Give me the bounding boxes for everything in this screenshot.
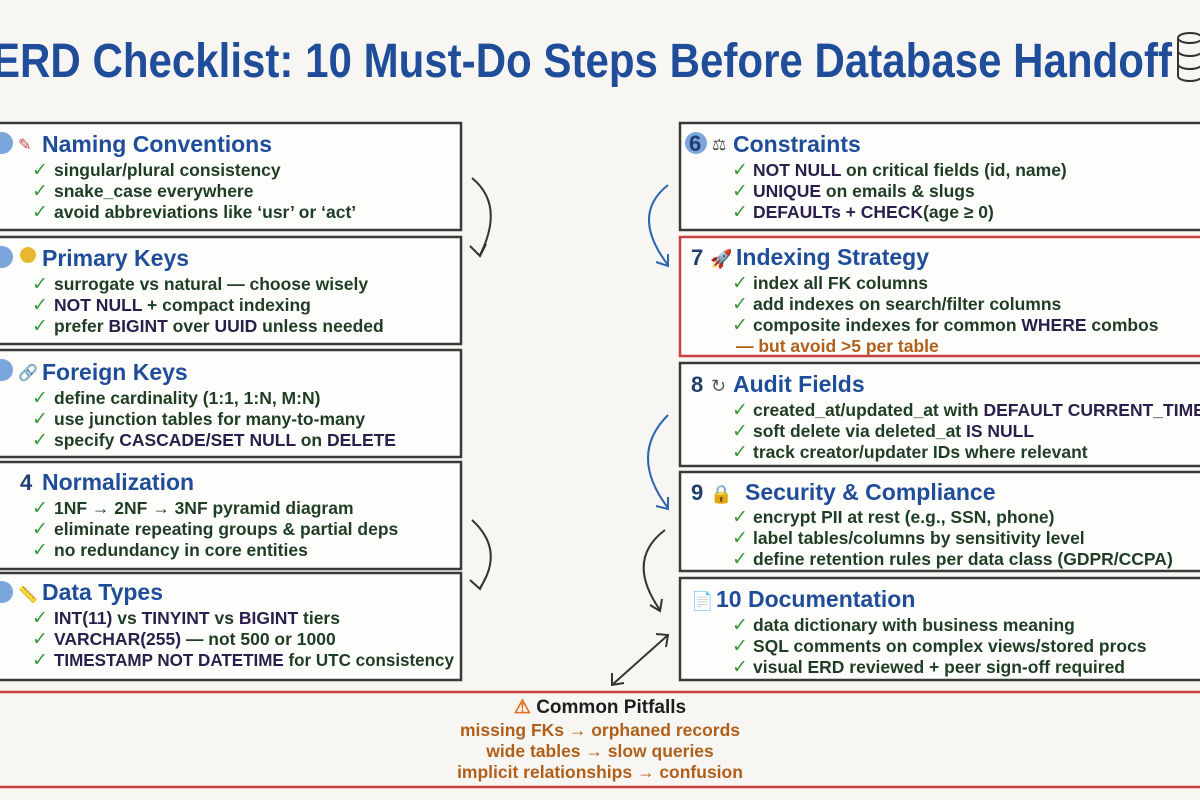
- panel: 1 naming conventions: snake_case everywhere: [54, 181, 254, 201]
- panel: 10 documentation: visual ERD reviewed + peer sign-off required: [753, 657, 1125, 677]
- panel: 2 primary keys: Primary Keys: [42, 245, 189, 271]
- panel: 3 foreign keys: ✓: [32, 429, 48, 451]
- panel: 5 data types: VARCHAR(255) — not 500 or 1000: [54, 629, 336, 649]
- panel: 2 primary keys: ✓: [32, 315, 48, 337]
- panel: 8 audit fields: [680, 363, 1200, 466]
- panel: 5 data types: TIMESTAMP NOT DATETIME for UTC consistency: [54, 650, 454, 670]
- panel: 7 indexing strategy: composite indexes for common WHERE combos: [753, 315, 1159, 335]
- panel: 9 security: ✓: [732, 527, 748, 549]
- panel: 9 security: ✓: [732, 548, 748, 570]
- panel: common pitfalls: [0, 692, 1200, 787]
- panel: 4 normalization: ✓: [32, 539, 48, 561]
- panel: 3 foreign keys: [0, 350, 461, 457]
- panel: 7 indexing strategy: ✓: [732, 314, 748, 336]
- panel: 4 normalization: no redundancy in core entities: [54, 540, 308, 560]
- panel: 1 naming conventions: ✓: [32, 201, 48, 223]
- panel: 1 naming conventions: ✓: [32, 180, 48, 202]
- panel: 8 audit fields: Audit Fields: [733, 371, 865, 397]
- panel: 4 normalization: [0, 462, 461, 569]
- panel: 4 normalization: Normalization: [42, 469, 194, 495]
- panel: 10 documentation: 📄: [691, 590, 713, 611]
- panel: common pitfalls: wide tables → slow queries: [485, 741, 714, 761]
- arrow: 6 to 7: [649, 185, 668, 266]
- panel: 1 naming conventions: [0, 123, 461, 230]
- panel: 9 security: encrypt PII at rest (e.g., SSN, phone): [753, 507, 1054, 527]
- panel: 10 documentation: [680, 578, 1200, 680]
- panel: 1 naming conventions: singular/plural consistency: [54, 160, 281, 180]
- panel: 5 data types: ✓: [32, 628, 48, 650]
- panel: common pitfalls: implicit relationships → confusion: [457, 762, 743, 782]
- panel: 7 indexing strategy: — but avoid >5 per table: [736, 336, 939, 356]
- panel: 6 constraints: ✓: [732, 159, 748, 181]
- panel: 9 security: 9: [691, 480, 703, 505]
- panel: 3 foreign keys: ✓: [32, 387, 48, 409]
- panel: 3 foreign keys: use junction tables for many-to-many: [54, 409, 365, 429]
- arrow: 8 to 9: [648, 415, 668, 509]
- panel: 9 security: 🔒: [710, 484, 732, 504]
- panel: 10 documentation: ✓: [732, 656, 748, 678]
- panel: 3 foreign keys: 🔗: [18, 363, 38, 382]
- panel: 8 audit fields: ✓: [732, 420, 748, 442]
- panel: 7 indexing strategy: ✓: [732, 293, 748, 315]
- panel: 3 foreign keys: Foreign Keys: [42, 359, 188, 385]
- panel: 3 foreign keys: define cardinality (1:1, 1:N, M:N): [54, 388, 320, 408]
- panel: 5 data types: INT(11) vs TINYINT vs BIGINT tiers: [54, 608, 340, 628]
- arrow: to pitfalls: [612, 634, 668, 685]
- panel: 4 normalization: eliminate repeating groups & partial deps: [54, 519, 399, 539]
- panel: common pitfalls: missing FKs → orphaned records: [460, 720, 740, 740]
- panel: 10 documentation: ✓: [732, 635, 748, 657]
- panel: 6 constraints: Constraints: [733, 131, 861, 157]
- panel: 6 constraints: [680, 123, 1200, 230]
- panel: 8 audit fields: ↻: [711, 376, 726, 396]
- panel: 3 foreign keys: specify CASCADE/SET NULL on DELETE: [54, 430, 396, 450]
- panel: common pitfalls: ⚠ Common Pitfalls: [514, 697, 686, 718]
- panel: 4 normalization: 4: [20, 470, 33, 495]
- panel: 2 primary keys: ✓: [32, 273, 48, 295]
- icon: database: [1178, 33, 1200, 81]
- arrow: 4 to 5: [470, 520, 491, 589]
- arrow: 9 to 10: [644, 530, 665, 611]
- panel: 8 audit fields: soft delete via deleted_at IS NULL: [753, 421, 1034, 441]
- panel: 6 constraints: ✓: [732, 201, 748, 223]
- panel: 10 documentation: 10 Documentation: [716, 586, 915, 612]
- panel: 7 indexing strategy: add indexes on search/filter columns: [753, 294, 1062, 314]
- panel: 7 indexing strategy: [680, 237, 1200, 356]
- panel: 8 audit fields: ✓: [732, 399, 748, 421]
- panel: 6 constraints: NOT NULL on critical fields (id, name): [753, 160, 1067, 180]
- panel: 8 audit fields: track creator/updater IDs where relevant: [753, 442, 1088, 462]
- panel: 6 constraints: UNIQUE on emails & slugs: [753, 181, 975, 201]
- panel: 5 data types: 📏: [18, 585, 38, 604]
- panel: 4 normalization: ✓: [32, 518, 48, 540]
- panel: 5 data types: ✓: [32, 607, 48, 629]
- panel: 5 data types: [0, 573, 461, 680]
- panel: 6 constraints: DEFAULTs + CHECK(age ≥ 0): [753, 202, 994, 222]
- panel: 3 foreign keys: ✓: [32, 408, 48, 430]
- panel: 2 primary keys: surrogate vs natural — choose wisely: [54, 274, 368, 294]
- panel: 1 naming conventions: avoid abbreviations like ‘usr’ or ‘act’: [54, 202, 356, 222]
- panel: 5 data types: ✓: [32, 649, 48, 671]
- panel: 4 normalization: ✓: [32, 497, 48, 519]
- panel: 10 documentation: data dictionary with business meaning: [753, 615, 1075, 635]
- panel: 7 indexing strategy: index all FK columns: [753, 273, 928, 293]
- panel: 6 constraints: ✓: [732, 180, 748, 202]
- panel: 6 constraints: ⚖: [712, 137, 726, 154]
- panel: 2 primary keys: NOT NULL + compact indexing: [54, 295, 311, 315]
- panel: 10 documentation: SQL comments on complex views/stored procs: [753, 636, 1147, 656]
- panel: 2 primary keys: ✓: [32, 294, 48, 316]
- arrow: 1 to 2: [470, 178, 491, 256]
- panel: 7 indexing strategy: 🚀: [710, 248, 732, 269]
- panel: 9 security: ✓: [732, 506, 748, 528]
- panel: 1 naming conventions: ✓: [32, 159, 48, 181]
- panel: 2 primary keys: [0, 237, 461, 344]
- panel: 7 indexing strategy: 7: [691, 245, 703, 270]
- panel: 6 constraints: 6: [689, 131, 701, 156]
- panel: 1 naming conventions: Naming Conventions: [42, 131, 272, 157]
- panel: 5 data types: Data Types: [42, 579, 163, 605]
- panel: 7 indexing strategy: ✓: [732, 272, 748, 294]
- panel: 9 security: label tables/columns by sensitivity level: [753, 528, 1085, 548]
- panel: 8 audit fields: 8: [691, 372, 703, 397]
- panel: 4 normalization: 1NF → 2NF → 3NF pyramid diagram: [54, 498, 354, 518]
- panel: 8 audit fields: ✓: [732, 441, 748, 463]
- panel: 7 indexing strategy: Indexing Strategy: [736, 244, 929, 270]
- panel: 1 naming conventions: ✎: [18, 137, 31, 154]
- panel: 10 documentation: ✓: [732, 614, 748, 636]
- panel: 9 security: Security & Compliance: [745, 479, 996, 505]
- panel: 9 security: define retention rules per data class (GDPR/CCPA): [753, 549, 1173, 569]
- panel: 9 security: [680, 472, 1200, 571]
- panel: 2 primary keys: prefer BIGINT over UUID unless needed: [54, 316, 384, 336]
